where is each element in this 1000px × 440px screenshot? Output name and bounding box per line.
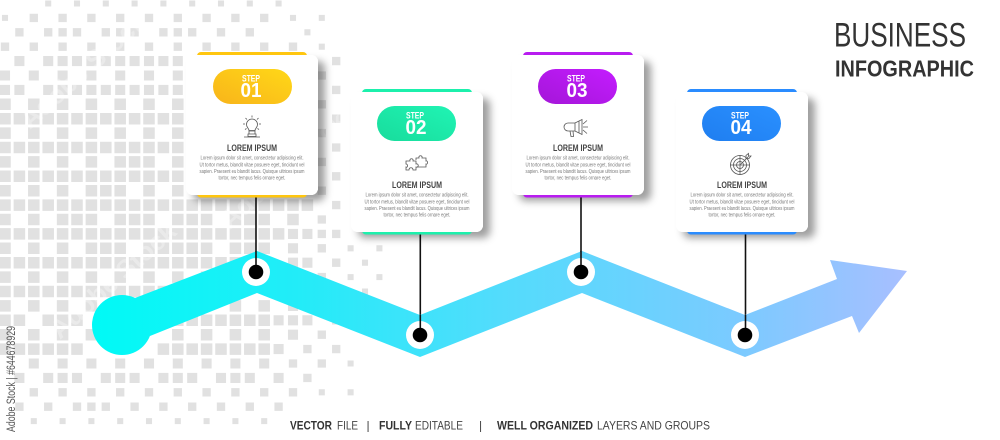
zigzag arrow timeline [92,251,907,357]
footer caption: FILE [337,418,358,432]
panel: step 4 card: STEP [731,110,749,122]
footer caption: | [366,418,370,432]
panel: step 1 card: sapien. Praesent eu blandit lacus. Quisque ultrices ipsum [200,169,305,175]
stock id vertical label: Adobe Stock | #644678929 [6,326,18,432]
icon: target [730,154,751,175]
panel: step 3 card: tortor, nec tempus felis ornare eget. [544,175,612,181]
icon: puzzle [406,156,428,170]
panel: step 3 card: sapien. Praesent eu blandit lacus. Quisque ultrices ipsum [526,169,631,175]
icon: light bulb [243,116,261,137]
panel: step 3 card: 03 [566,80,588,102]
panel: step 4 card: sapien. Praesent eu blandit lacus. Quisque ultrices ipsum [690,206,795,212]
footer caption: | [479,418,482,432]
panel: step 2 card: Lorem ipsum dolor sit amet, consectetur adipiscing elit. [366,193,469,199]
panel: step 3 card: LOREM IPSUM [553,143,603,153]
background: halftone pixel pattern [0,4,382,421]
title: INFOGRAPHIC [835,56,974,82]
footer caption [290,418,710,432]
panel: step 2 card: sapien. Praesent eu blandit lacus. Quisque ultrices ipsum [364,206,470,212]
panel: step 1 card: LOREM IPSUM [227,143,277,153]
panel: step 1 card: 01 [240,80,262,102]
panel: step 1 card: Lorem ipsum dolor sit amet, consectetur adipiscing elit. [200,156,304,162]
panel: step 2 card [351,89,483,234]
footer caption: WELL ORGANIZED [497,418,593,432]
panel: step 2 card: Ut tortor metus, blandit vitae posuere eget, tincidunt vel [364,199,470,205]
icon: megaphone [564,120,588,136]
faint stock watermarks: Adobe Stock [44,215,183,344]
panel: step 2 card: LOREM IPSUM [392,180,442,190]
panel: step 2 card: tortor, nec tempus felis ornare eget. [384,212,451,218]
footer caption: VECTOR [290,418,332,432]
faint stock watermarks: Adobe Stock [214,105,353,234]
panel: step 2 card: 02 [406,117,426,139]
footer caption: LAYERS AND GROUPS [597,418,710,432]
faint stock watermarks: Adobe Stock [14,5,153,134]
panel: step 1 card: Ut tortor metus, blandit vitae posuere eget, tincidunt vel [200,162,304,168]
panel: step 1 card: STEP [242,74,260,84]
title [834,16,974,82]
panel: step 4 card: 04 [730,117,752,139]
panel: step 4 card [676,89,808,234]
timeline nodes [242,251,759,349]
footer caption: EDITABLE [415,418,463,432]
panel: step 4 card: LOREM IPSUM [717,180,767,190]
panel: step 3 card: Lorem ipsum dolor sit amet, consectetur adipiscing elit. [526,156,630,162]
panel: step 3 card: STEP [567,74,585,84]
footer caption: FULLY [379,418,412,432]
panel: step 4 card: Ut tortor metus, blandit vitae posuere eget, tincidunt vel [690,199,794,205]
faint stock watermarks [14,5,353,344]
panel: step 2 card: STEP [406,110,424,122]
connector lines [256,195,746,335]
panel: step 4 card: tortor, nec tempus felis ornare eget. [708,212,776,218]
panel: step 3 card: Ut tortor metus, blandit vitae posuere eget, tincidunt vel [526,162,630,168]
panel: step 4 card: Lorem ipsum dolor sit amet, consectetur adipiscing elit. [690,193,794,199]
panel: step 1 card [186,52,318,198]
panel: step 3 card [512,52,644,198]
panel: step 1 card: tortor, nec tempus felis ornare eget. [218,175,286,181]
